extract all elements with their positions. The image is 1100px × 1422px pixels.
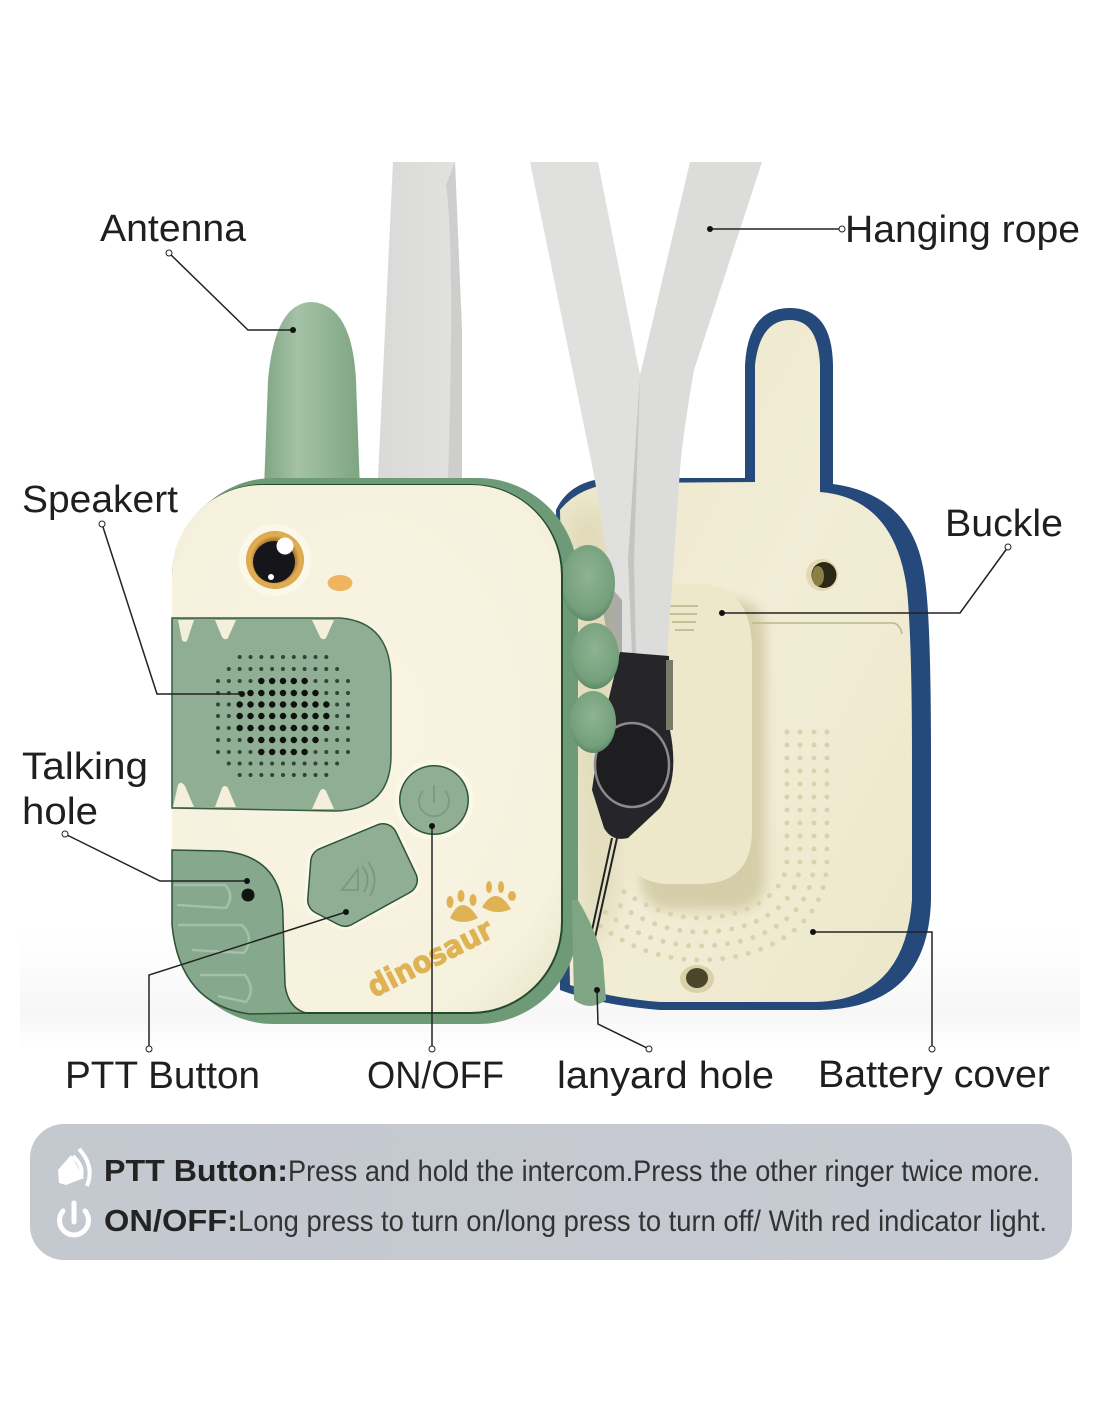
paw prints <box>446 881 516 922</box>
black clasp body <box>592 652 673 839</box>
label: Talking hole: hole <box>22 791 98 833</box>
label: Talking hole: Talking <box>22 746 148 788</box>
front walkie talkie <box>172 302 619 1024</box>
bottom hole <box>680 965 714 993</box>
mouth panel <box>172 618 391 811</box>
ptt button <box>322 838 403 912</box>
ptt description: PTT Button: <box>104 1153 288 1188</box>
nostril <box>328 575 352 591</box>
green housing <box>174 478 578 1024</box>
on/off description: Long press to turn on/long press to turn off/ With red indicator light. <box>238 1205 1047 1238</box>
cream front <box>172 484 563 1014</box>
leader: on/off <box>429 823 435 1052</box>
label: lanyard hole: lanyard hole <box>557 1055 774 1097</box>
ptt description: Press and hold the intercom.Press the other ringer twice more. <box>288 1155 1040 1188</box>
leader: hanging rope <box>707 226 845 232</box>
spine bumps <box>561 545 619 753</box>
shell shading <box>565 500 627 980</box>
leader: buckle <box>719 544 1011 616</box>
leader: speaker <box>99 521 245 697</box>
callout leader lines <box>62 226 1011 1052</box>
info panel <box>30 1124 1072 1260</box>
lanyard ear <box>572 900 606 1006</box>
label: PTT Button: PTT Button <box>65 1055 260 1097</box>
icon: power <box>59 1203 89 1235</box>
lanyard clasp <box>582 652 673 990</box>
panel background <box>30 1124 1072 1260</box>
label: Talking hole <box>22 746 148 833</box>
speaker grille <box>218 657 349 775</box>
buckle clip <box>622 584 752 884</box>
clip grooves <box>668 606 698 630</box>
icon: ptt sound <box>58 1149 90 1186</box>
left hanging strap <box>378 162 462 480</box>
label: Antenna: Antenna <box>100 208 247 250</box>
label: Battery cover: Battery cover <box>818 1054 1050 1096</box>
raised dots pattern <box>600 732 827 960</box>
right hanging strap <box>530 162 762 660</box>
cream back shell <box>560 320 912 1002</box>
on/off button <box>394 760 474 840</box>
leader: lanyard hole <box>594 987 652 1052</box>
label: Speakert: Speakert <box>22 479 178 521</box>
grey fitting <box>666 660 673 730</box>
eye <box>239 524 311 596</box>
clasp ring <box>595 723 669 807</box>
label: Buckle: Buckle <box>945 503 1063 545</box>
antenna <box>264 302 360 490</box>
talking grip panel <box>172 850 306 1014</box>
teeth <box>178 620 334 642</box>
dinosaur wordmark: dinosaur <box>362 912 499 1005</box>
leader: battery cover <box>810 929 935 1052</box>
label: ON/OFF: ON/OFF <box>367 1055 504 1097</box>
leader: ptt button <box>146 909 349 1052</box>
leader: antenna <box>166 250 296 333</box>
lanyard cord <box>586 838 617 960</box>
on/off description: ON/OFF: <box>104 1203 238 1238</box>
back walkie talkie <box>556 308 931 1010</box>
top hole <box>806 559 838 591</box>
cord loop <box>582 953 598 990</box>
blue housing <box>556 308 931 1010</box>
clip shadow <box>640 600 765 910</box>
battery cover seam <box>752 623 902 634</box>
ground shadow <box>20 930 1080 1050</box>
label: Hanging rope: Hanging rope <box>845 209 1080 251</box>
leader: talking hole <box>62 831 250 884</box>
